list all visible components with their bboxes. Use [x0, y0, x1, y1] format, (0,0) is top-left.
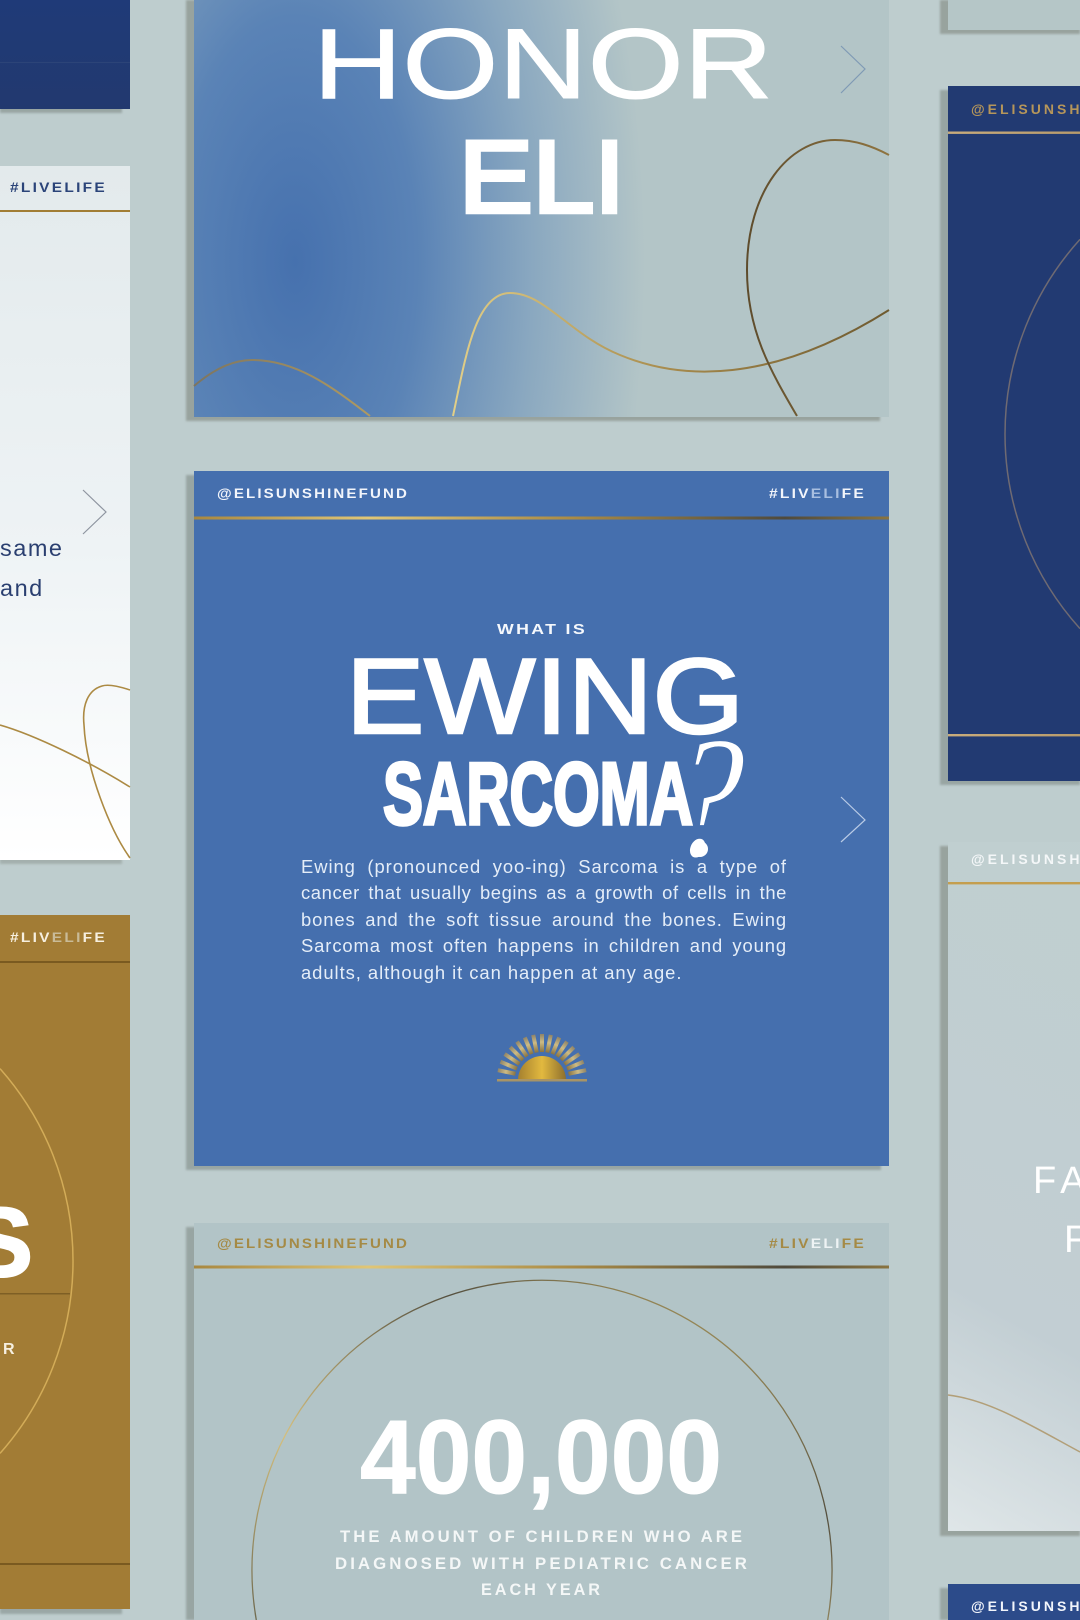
header hashtag: #LIV ELIFE	[769, 485, 866, 501]
arrow	[841, 46, 865, 93]
header hashtag: #LIVELIFE	[10, 180, 107, 195]
header rule	[194, 1266, 889, 1268]
caption: THE AMOUNT OF CHILDREN WHO ARE	[340, 1528, 745, 1546]
gold curve	[948, 1395, 1080, 1452]
panel: pale card top right	[940, 0, 1080, 34]
panel: navy card bottom right	[940, 1584, 1080, 1620]
body paragraph: Sarcoma most often happens in children and young	[301, 935, 787, 956]
heading: eli: ELI	[459, 120, 625, 234]
body paragraph: Ewing (pronounced yoo-ing) Sarcoma is a type of	[301, 856, 787, 877]
heading: sarcoma: SARCOMA	[383, 744, 693, 843]
heading: ewing: EWING	[346, 636, 744, 756]
panel: 400,000 statistic card	[186, 1223, 889, 1620]
header hashtag: #LIV ELI FE	[10, 930, 107, 945]
circle outline	[1005, 239, 1080, 629]
header handle: @ELISUNSH	[971, 851, 1080, 867]
panel: pale card right	[940, 842, 1080, 1536]
arrow	[841, 797, 865, 842]
caption: EACH YEAR	[481, 1581, 603, 1599]
question mark: ?	[660, 700, 763, 894]
panel: honor eli card	[186, 0, 889, 421]
body paragraph: cancer that usually begins as a growth of cells in the	[301, 882, 787, 903]
header hashtag: #LIV ELIFE	[769, 1235, 866, 1251]
header rule	[194, 516, 889, 520]
panel: navy card top left	[0, 0, 130, 113]
caption: DIAGNOSED WITH PEDIATRIC CANCER	[335, 1555, 750, 1573]
caption fragment: R	[3, 1341, 15, 1358]
header handle: @ELISUNSH	[971, 101, 1080, 117]
panel: what is ewing sarcoma card	[186, 471, 889, 1170]
icon: sun logo	[497, 1034, 587, 1082]
body paragraph: bones and the soft tissue around the bones. Ewing	[301, 909, 787, 930]
heading: honor: HONOR	[313, 8, 773, 119]
arrow	[83, 490, 106, 534]
panel: gold card left	[0, 915, 130, 1614]
body paragraph: adults, although it can happen at any age.	[301, 962, 682, 983]
gold curves	[0, 685, 130, 858]
panel: white card left: and	[0, 575, 44, 601]
circle outline	[0, 1069, 73, 1453]
circle outline	[252, 1280, 832, 1620]
header handle: @ELISUNSH	[971, 1598, 1080, 1614]
gold curves	[194, 140, 889, 416]
body text fragment: same	[0, 535, 63, 561]
panel: white card left	[0, 166, 130, 864]
big number: 400,000	[360, 1399, 722, 1516]
caption	[335, 1528, 750, 1599]
panel: navy card right	[940, 86, 1080, 785]
header handle: @ELISUNSHINEFUND	[217, 485, 409, 501]
header handle: @ELISUNSHINEFUND	[217, 1235, 409, 1251]
eyebrow: WHAT IS	[497, 621, 587, 638]
body paragraph	[301, 854, 787, 994]
